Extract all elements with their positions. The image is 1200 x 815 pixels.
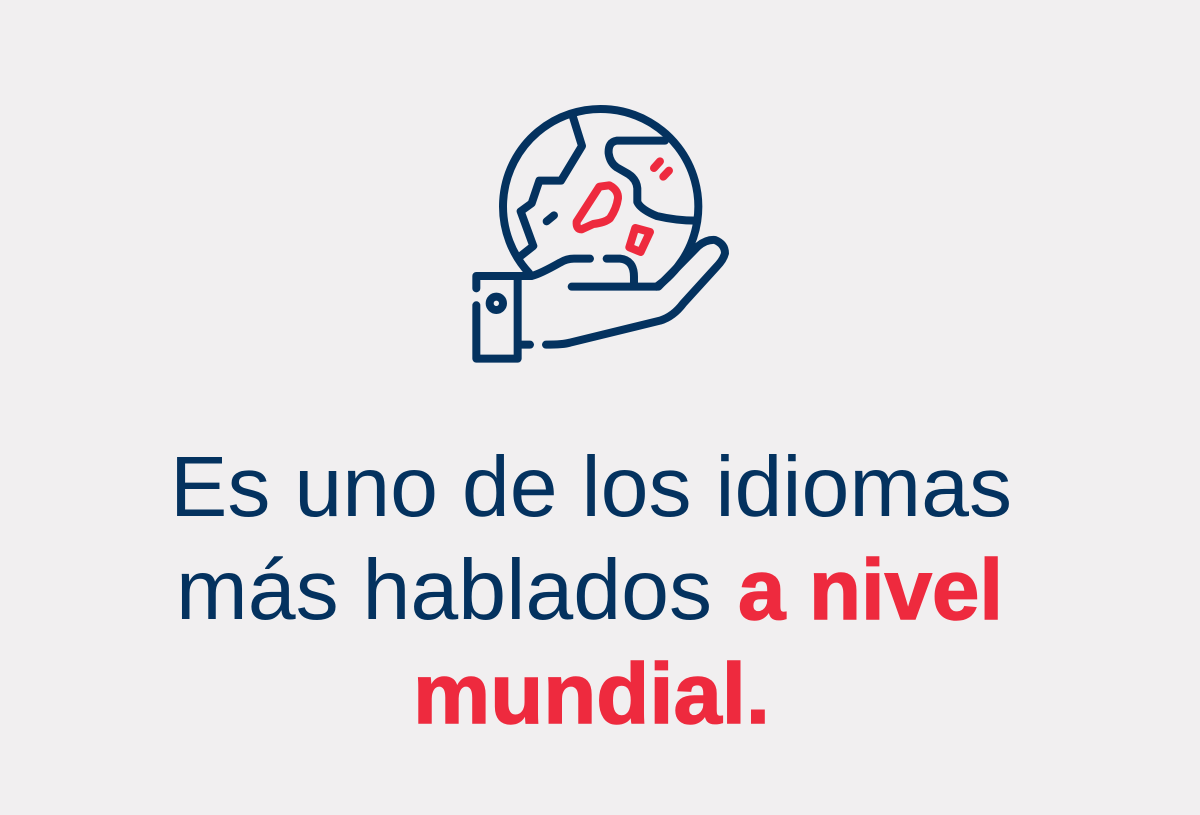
globe outline and continents — [503, 109, 698, 287]
hand and cuff — [476, 240, 725, 359]
line 1: Es uno de los idiomas — [170, 440, 1012, 535]
line 3 red: mundial. — [413, 647, 770, 742]
red regions on globe — [577, 161, 669, 252]
line 2 navy: más hablados — [176, 543, 712, 638]
heading text — [170, 440, 1012, 742]
icon: hand holding globe — [476, 109, 725, 359]
line 2 red: a nivel — [738, 543, 1003, 638]
